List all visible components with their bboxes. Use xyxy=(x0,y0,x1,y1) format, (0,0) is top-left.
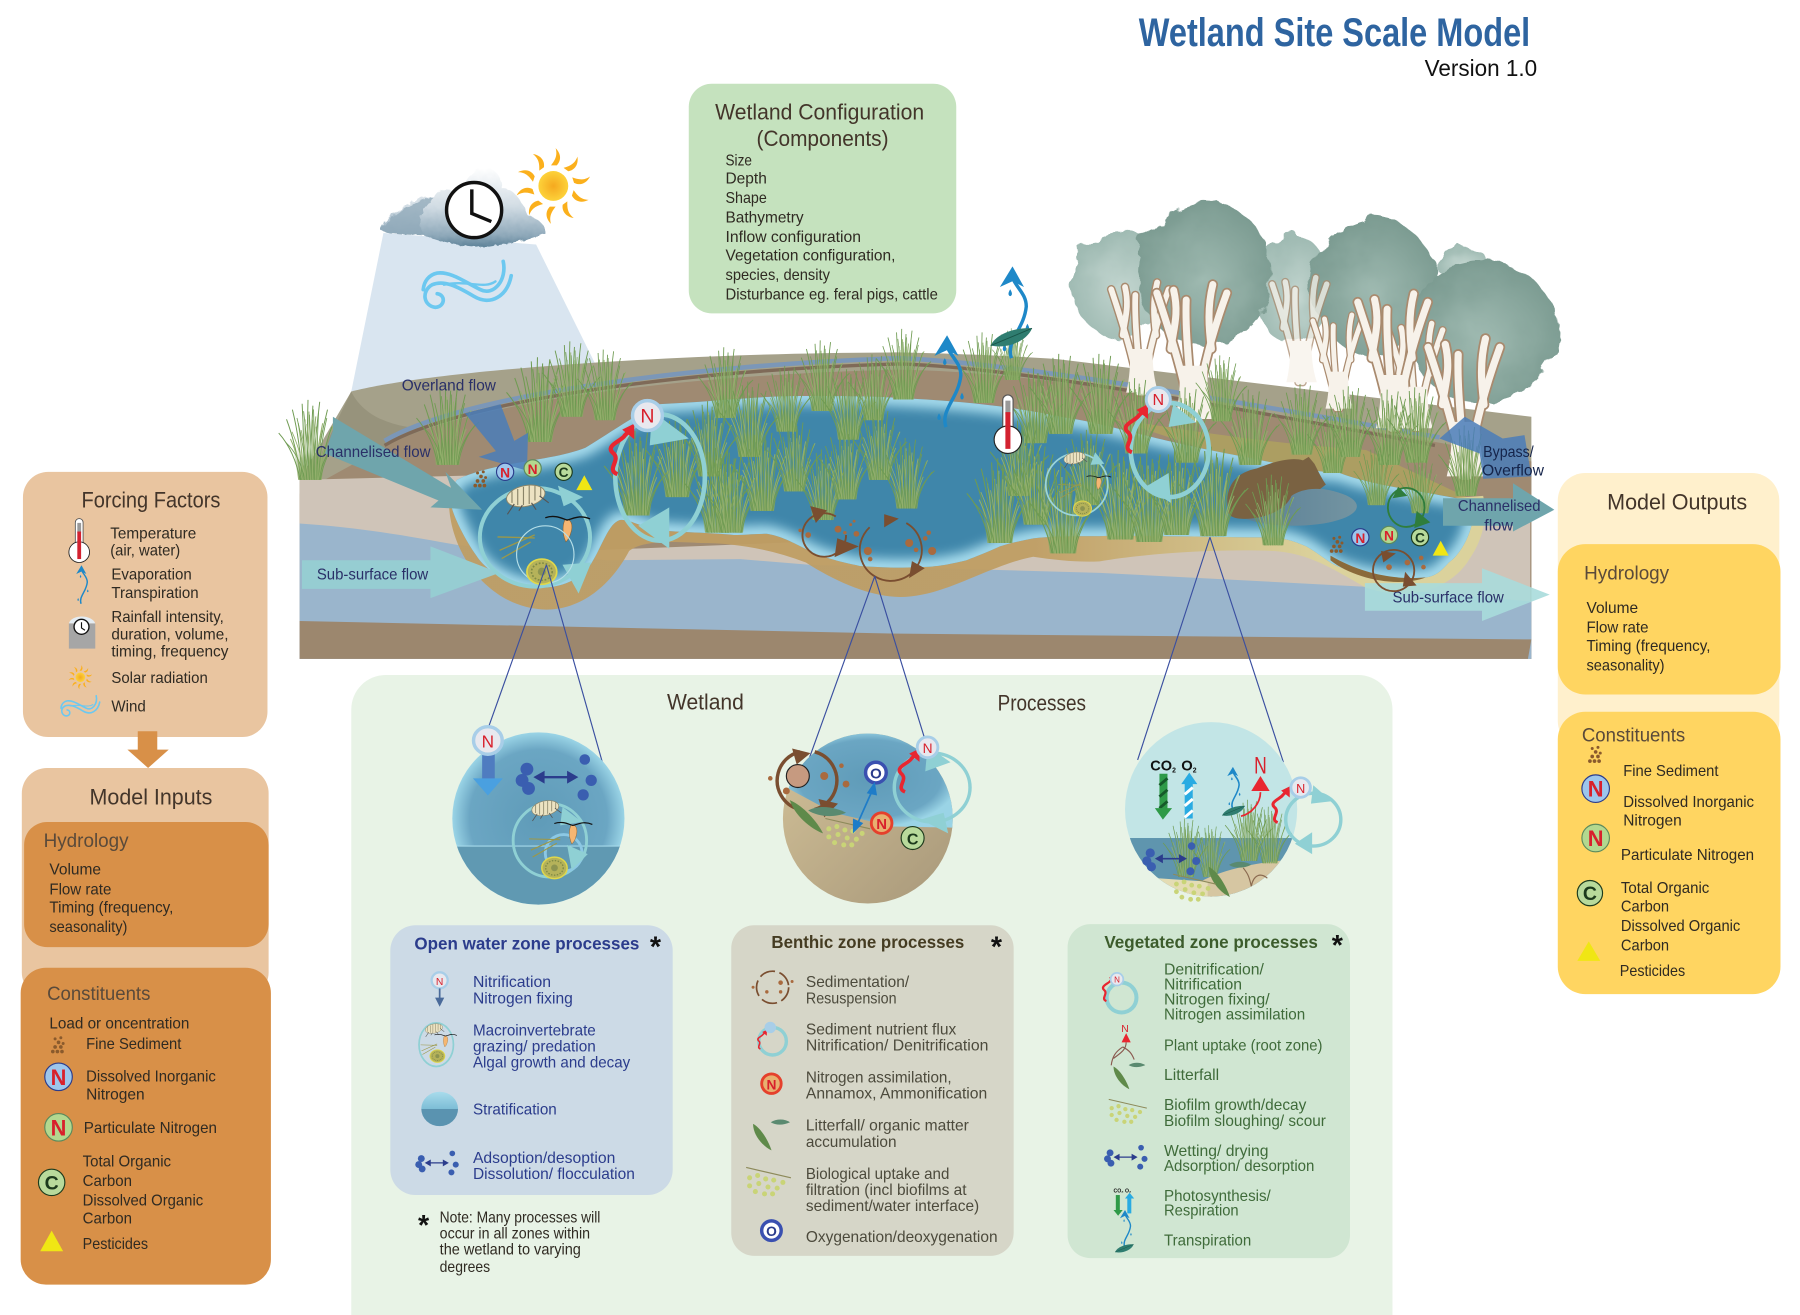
heading: wetland configuration: Wetland Configuration xyxy=(715,99,924,124)
icon: oxygenation: O xyxy=(766,1224,777,1239)
bypass overflow arrow xyxy=(1440,417,1531,479)
panel: wetland processes background xyxy=(351,675,1392,1315)
text: photosynthesis xyxy=(1164,1188,1271,1220)
right basin process icons: N xyxy=(1384,529,1394,544)
text: denitrification: Nitrogen assimilation xyxy=(1164,1006,1305,1023)
text: biofilm: Biological uptake and xyxy=(806,1166,949,1183)
zoom circle: benthic: N xyxy=(923,741,933,756)
feral pig xyxy=(1227,457,1357,526)
text: nitrification: Nitrogen fixing xyxy=(473,990,573,1007)
trees behind wetland xyxy=(1071,201,1559,476)
heading: wetland processes: Processes xyxy=(998,691,1086,716)
text: nutrient flux: Nitrification/ Denitrification xyxy=(806,1037,988,1054)
flow labels xyxy=(316,377,1545,607)
icon: nutrient flux xyxy=(758,1022,786,1055)
asterisk: * xyxy=(1332,930,1344,962)
co2 and o2 labels: CO xyxy=(1150,757,1172,774)
text: photosynthesis: Respiration xyxy=(1164,1203,1239,1220)
icon: particulate nitrogen: N xyxy=(51,1115,66,1140)
sub-panel: hydrology xyxy=(1558,544,1780,695)
text: rainfall: Rainfall intensity, xyxy=(111,609,224,626)
right basin process icons xyxy=(1330,487,1449,591)
icon: organic carbon: C xyxy=(1583,883,1597,905)
channel stripe xyxy=(385,358,1440,445)
list: components: Size xyxy=(726,152,752,169)
list: components: Shape xyxy=(726,190,767,207)
note: the wetland to varying xyxy=(440,1242,581,1259)
text: nitrification xyxy=(473,974,573,1007)
sub-panel: hydrology xyxy=(24,822,269,947)
icon: photosynthesis xyxy=(1114,1189,1134,1216)
arrow: forcing to inputs xyxy=(127,731,169,768)
heading: wetland configuration: (Components) xyxy=(757,126,889,151)
zoom circle: benthic xyxy=(768,730,970,903)
icon: organic carbon xyxy=(1577,880,1603,906)
icon: plant uptake: N xyxy=(1121,1024,1129,1035)
sand layer xyxy=(300,475,1530,659)
sub-panel: constituents: Carbon xyxy=(83,1211,132,1228)
sub-panel: hydrology: seasonality) xyxy=(1586,657,1665,674)
text: macroinvertebrate: grazing/ predation xyxy=(473,1039,596,1056)
text: adsorption xyxy=(473,1150,635,1183)
text: photosynthesis: Photosynthesis/ xyxy=(1164,1188,1271,1205)
note: * xyxy=(418,1210,430,1242)
icon: biofilm xyxy=(746,1167,791,1196)
heading: model inputs: Model Inputs xyxy=(90,785,212,810)
list: components: Depth xyxy=(726,171,767,188)
icon: stratification xyxy=(421,1092,458,1126)
sub-panel: constituents: Dissolved Organic xyxy=(1621,918,1741,935)
zoom circle: vegetated: N xyxy=(1254,753,1267,780)
sub-panel: constituents: Pesticides xyxy=(83,1236,148,1253)
sub-panel: constituents: Carbon xyxy=(83,1173,132,1190)
grass tufts xyxy=(279,328,1493,553)
text: evaporation: Evaporation xyxy=(111,567,192,584)
icon: litterfall xyxy=(753,1120,790,1150)
heading: forcing factors: Forcing Factors xyxy=(82,487,220,512)
zoom circle: benthic: C xyxy=(907,830,919,848)
panel: vegetated zone processes xyxy=(1068,924,1350,1258)
text: sedimentation: Resuspension xyxy=(806,990,897,1007)
icon: dissolved inorganic nitrogen xyxy=(45,1063,72,1091)
flow labels: Channelised flow xyxy=(316,444,431,461)
transpiration arrows xyxy=(934,266,1032,427)
icon: transpiration xyxy=(1115,1210,1134,1252)
text: biofilm: Biofilm sloughing/ scour xyxy=(1164,1113,1326,1130)
flow labels: flow xyxy=(1484,517,1514,534)
list: components: Bathymetry xyxy=(726,210,804,227)
flow labels: Overflow xyxy=(1482,462,1545,479)
icon: dissolved inorganic nitrogen: N xyxy=(51,1065,66,1090)
flow labels: Bypass/ xyxy=(1483,444,1534,461)
text: biofilm xyxy=(1164,1097,1326,1130)
panel: model outputs xyxy=(1558,473,1780,994)
foreground crowns xyxy=(1136,201,1559,402)
text: transpiration: Transpiration xyxy=(1164,1233,1251,1250)
bottom soil xyxy=(300,621,1531,659)
sub-panel: constituents: Particulate Nitrogen xyxy=(1621,847,1754,864)
sub-panel: hydrology: Volume xyxy=(49,862,101,879)
text: nutrient flux: Sediment nutrient flux xyxy=(806,1021,957,1038)
text: wind: Wind xyxy=(111,699,146,716)
icon: fine sediment xyxy=(51,1036,65,1053)
text: rainfall xyxy=(111,609,229,661)
text: sedimentation: Sedimentation/ xyxy=(806,974,910,991)
sub-panel: constituents: Total Organic xyxy=(83,1153,171,1170)
left basin process icons: C xyxy=(559,465,569,480)
cloud with clock xyxy=(380,168,545,247)
text: nitrification: Nitrification xyxy=(473,974,551,991)
text: rainfall: duration, volume, xyxy=(111,626,228,643)
text: denitrification: Denitrification/ xyxy=(1164,962,1265,979)
sub-panel: constituents: Fine Sediment xyxy=(86,1036,182,1053)
text: adsorption: Adsoption/desoption xyxy=(473,1150,615,1167)
wetland block cross-section xyxy=(300,352,1531,659)
heading: wetland processes xyxy=(667,689,1086,716)
flow labels: Sub-surface flow xyxy=(1392,590,1505,607)
sub-panel: hydrology: seasonality) xyxy=(49,919,127,936)
note xyxy=(418,1210,600,1276)
icon: photosynthesis: CO₂ O₂ xyxy=(1114,1189,1132,1195)
text: macroinvertebrate: Algal growth and decay xyxy=(473,1055,630,1072)
version: Version 1.0 xyxy=(1425,55,1537,81)
list: components: Inflow configuration xyxy=(726,229,861,246)
zoom circle: benthic: N xyxy=(876,816,887,833)
sub-panel: constituents: Constituents xyxy=(1582,725,1685,747)
wind xyxy=(423,261,511,307)
icon: litterfall xyxy=(1114,1063,1145,1089)
heading: wetland configuration xyxy=(715,99,924,151)
text: macroinvertebrate xyxy=(473,1022,630,1072)
zoom connector lines xyxy=(488,537,1283,765)
list: components xyxy=(726,152,938,304)
icon: evaporation xyxy=(76,565,88,604)
sediment xyxy=(449,482,1485,610)
icon: oxygenation xyxy=(762,1221,781,1240)
list: components: Vegetation configuration, xyxy=(726,248,895,265)
panel: benthic zone processes xyxy=(731,925,1014,1256)
sub-panel: constituents: Pesticides xyxy=(1620,963,1685,980)
text: adsorption: Dissolution/ flocculation xyxy=(473,1166,635,1183)
heading: open water: Open water zone processes xyxy=(414,933,640,953)
bank brown xyxy=(300,370,1531,659)
sub-panel: constituents: Load or oncentration xyxy=(49,1016,189,1033)
flow arrows xyxy=(302,404,1554,621)
right basin process icons: C xyxy=(1415,530,1425,545)
sub-panel: constituents: Total Organic xyxy=(1621,880,1710,897)
note: Note: Many processes will xyxy=(440,1210,600,1227)
left bank shadow xyxy=(321,391,471,453)
sub-panel: constituents: Constituents xyxy=(47,983,151,1005)
sub-panel: hydrology: Hydrology xyxy=(44,830,129,852)
sediment rings xyxy=(798,507,936,592)
text: plant uptake: Plant uptake (root zone) xyxy=(1164,1037,1322,1054)
panel: open water zone processes xyxy=(390,925,673,1195)
text: temperature: Temperature xyxy=(110,525,196,542)
sub-panel: hydrology: Flow rate xyxy=(49,881,111,898)
sub-panel: constituents xyxy=(21,968,271,1285)
icon: particulate nitrogen xyxy=(45,1114,72,1141)
icon: organic carbon: C xyxy=(45,1172,59,1194)
icon: nitrogen assimilation xyxy=(762,1074,781,1093)
text: denitrification xyxy=(1164,962,1305,1023)
text: nutrient flux xyxy=(806,1021,988,1054)
text: litterfall: Litterfall xyxy=(1164,1067,1219,1084)
panel: forcing factors xyxy=(23,472,267,737)
sub-panel: constituents: Dissolved Inorganic xyxy=(86,1068,216,1085)
text: wetting: Wetting/ drying xyxy=(1164,1143,1268,1160)
panel: model inputs xyxy=(21,768,271,1285)
sub-panel: constituents: Fine Sediment xyxy=(1623,763,1719,780)
sub-surface flow out arrow xyxy=(1365,568,1550,621)
icon: adsorption xyxy=(415,1151,459,1175)
text: temperature: (air, water) xyxy=(110,543,180,560)
left basin process icons: N xyxy=(528,462,538,477)
co2 and o2 labels: 2 xyxy=(1193,768,1197,775)
note: degrees xyxy=(440,1259,490,1276)
icon: nitrification xyxy=(432,972,448,1007)
icon: plant uptake xyxy=(1111,1024,1134,1065)
zoom circle: vegetated xyxy=(1124,722,1341,902)
heading: benthic: Benthic zone processes xyxy=(771,932,964,952)
nitrogen cycle ring right xyxy=(1126,387,1209,503)
nitrogen cycle ring right: N xyxy=(1152,391,1164,409)
sub-panel: constituents: Dissolved Inorganic xyxy=(1623,794,1754,811)
note: occur in all zones within xyxy=(440,1226,590,1243)
eucalypt trunks xyxy=(1111,278,1500,476)
text: nitrogen assimilation: Nitrogen assimilation, xyxy=(806,1070,952,1087)
icon: dissolved inorganic nitrogen: N xyxy=(1588,777,1604,802)
icon: particulate nitrogen xyxy=(1582,824,1609,852)
sub-panel: hydrology: Hydrology xyxy=(1584,563,1669,585)
upper surface xyxy=(300,352,1531,659)
list: components: Disturbance eg. feral pigs, cattle xyxy=(726,287,938,304)
sub-panel: constituents xyxy=(1558,712,1780,994)
flow labels: Channelised xyxy=(1458,498,1541,515)
sub-panel: constituents: Carbon xyxy=(1621,938,1669,955)
channelised flow in arrow xyxy=(325,417,482,510)
text: denitrification: Nitrogen fixing/ xyxy=(1164,991,1270,1008)
text: oxygenation: Oxygenation/deoxygenation xyxy=(806,1229,998,1246)
heading: model outputs: Model Outputs xyxy=(1607,490,1747,515)
sun xyxy=(515,148,591,224)
icon: wetting xyxy=(1104,1145,1148,1170)
text: biofilm xyxy=(806,1166,979,1215)
clock xyxy=(447,183,502,238)
sub-panel: constituents: Dissolved Organic xyxy=(83,1192,203,1209)
left basin process icons xyxy=(473,460,592,594)
text: nitrogen assimilation: Annamox, Ammonification xyxy=(806,1086,987,1103)
icon: denitrification: N xyxy=(1114,976,1120,985)
sub-panel: constituents: Nitrogen xyxy=(86,1087,145,1104)
pond water xyxy=(451,396,1474,588)
icon: rainfall xyxy=(69,616,95,649)
text: solar: Solar radiation xyxy=(111,670,208,687)
icon: particulate nitrogen: N xyxy=(1588,826,1604,851)
icon: fine sediment xyxy=(1588,746,1602,763)
left basin process icons: N xyxy=(500,466,510,481)
flow labels: Sub-surface flow xyxy=(317,567,429,584)
text: temperature xyxy=(110,525,196,560)
text: litterfall: Litterfall/ organic matter xyxy=(806,1118,969,1135)
zoom circle: vegetated: N xyxy=(1296,782,1305,796)
text: rainfall: timing, frequency xyxy=(111,644,229,661)
text: wetting: Adsorption/ desorption xyxy=(1164,1158,1314,1175)
icon: sedimentation xyxy=(752,971,794,1003)
icon: solar xyxy=(68,665,93,689)
heading: wetland processes: Wetland xyxy=(667,689,744,714)
nitrogen cycle ring left: N xyxy=(640,405,654,427)
text: biofilm: filtration (incl biofilms at xyxy=(806,1182,967,1199)
icon: dissolved inorganic nitrogen xyxy=(1582,775,1609,802)
icon: organic carbon xyxy=(38,1169,65,1196)
text: litterfall: accumulation xyxy=(806,1134,897,1151)
icon: wind xyxy=(61,696,100,716)
right basin process icons: N xyxy=(1355,531,1365,546)
co2 and o2 labels: O xyxy=(1181,757,1193,774)
sub-panel: hydrology: Timing (frequency, xyxy=(49,900,173,917)
icon: thermometer xyxy=(69,519,90,563)
light cone from weather xyxy=(351,233,603,391)
panel: wetland configuration xyxy=(689,84,956,313)
sub-panel: hydrology: Volume xyxy=(1586,600,1638,617)
icon: biofilm xyxy=(1109,1099,1147,1124)
text: evaporation: Transpiration xyxy=(111,585,199,602)
text: nitrogen assimilation xyxy=(806,1070,987,1103)
channelised flow out arrow xyxy=(1443,483,1554,532)
overland flow arrow xyxy=(465,404,528,471)
flow labels: Overland flow xyxy=(402,377,497,394)
asterisk: * xyxy=(991,931,1003,963)
small macroinvertebrate ring xyxy=(1046,450,1111,516)
co2 and o2 labels xyxy=(1150,757,1197,775)
text: sedimentation xyxy=(806,974,910,1007)
thermometer in scene xyxy=(994,395,1022,453)
list: components: species, density xyxy=(726,267,830,284)
zoom circle: open water: N xyxy=(482,731,494,751)
text: wetting xyxy=(1164,1143,1314,1175)
sub-panel: constituents: Particulate Nitrogen xyxy=(84,1120,217,1137)
asterisk: * xyxy=(650,931,662,963)
text: evaporation xyxy=(111,567,199,602)
sub-surface flow in arrow xyxy=(302,546,499,598)
text: denitrification: Nitrification xyxy=(1164,977,1242,994)
icon: nitrification: N xyxy=(436,977,443,988)
yellow bank patch xyxy=(1114,419,1474,501)
nitrogen cycle ring left xyxy=(611,401,705,549)
text: biofilm: sediment/water interface) xyxy=(806,1198,979,1215)
sub-panel: constituents: Carbon xyxy=(1621,898,1669,915)
icon: pesticides xyxy=(40,1231,63,1251)
zoom circle: benthic: O xyxy=(870,765,882,782)
sub-panel: hydrology: Flow rate xyxy=(1586,620,1648,637)
icon: macroinvertebrate xyxy=(419,1022,457,1066)
text: litterfall xyxy=(806,1118,969,1151)
icon: nitrogen assimilation: N xyxy=(766,1077,776,1092)
heading: vegetated: Vegetated zone processes xyxy=(1104,932,1318,952)
text: stratification: Stratification xyxy=(473,1102,557,1119)
title: Wetland Site Scale Model xyxy=(1139,10,1530,55)
icon: pesticides xyxy=(1577,941,1600,961)
background crowns xyxy=(1071,231,1489,344)
sub-panel: hydrology: Timing (frequency, xyxy=(1586,638,1710,655)
icon: denitrification xyxy=(1103,973,1136,1013)
groundwater xyxy=(300,523,1531,659)
sub-panel: constituents: Nitrogen xyxy=(1623,812,1682,829)
co2 and o2 labels: 2 xyxy=(1172,768,1176,775)
text: macroinvertebrate: Macroinvertebrate xyxy=(473,1022,596,1039)
text: biofilm: Biofilm growth/decay xyxy=(1164,1097,1307,1114)
zoom circle: open water xyxy=(452,727,624,909)
